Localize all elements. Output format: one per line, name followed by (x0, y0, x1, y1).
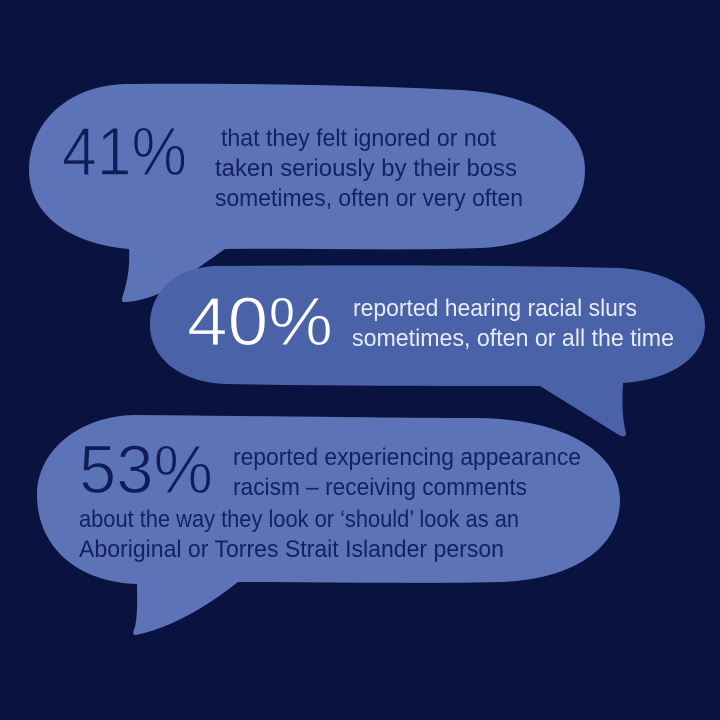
bubble shape with tail (150, 265, 705, 436)
panel: 53% speech bubble (37, 415, 620, 635)
text: 53% description (79, 444, 581, 563)
text: 53% description: reported experiencing appearance (233, 444, 581, 471)
text: 40% description (352, 295, 674, 352)
text: 53% description: Aboriginal or Torres Strait Islander person (79, 536, 504, 563)
panel: 41% speech bubble (29, 84, 585, 302)
text: 41% description: taken seriously by their boss (215, 155, 517, 182)
text: 53% description: racism – receiving comments (233, 474, 527, 501)
stat: 40%: 40% (187, 283, 333, 360)
bubble shape with tail (29, 84, 585, 302)
text: 40% description: reported hearing racial slurs (353, 295, 637, 322)
stat: 41%: 41% (62, 113, 187, 190)
bubble shape with tail (37, 415, 620, 635)
panel: 40% speech bubble (150, 265, 705, 436)
stat: 53%: 53% (79, 431, 213, 508)
text: 40% description: sometimes, often or all the time (352, 325, 674, 352)
text: 41% description: that they felt ignored or not (221, 125, 496, 152)
text: 53% description: about the way they look or ‘should’ look as an (79, 506, 519, 533)
text: 41% description (215, 125, 523, 212)
text: 41% description: sometimes, often or very often (215, 185, 523, 212)
